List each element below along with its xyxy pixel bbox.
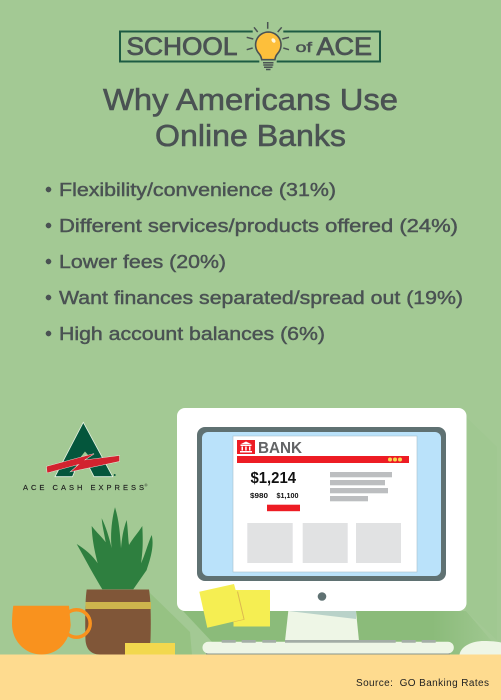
logo: School of ACE: SCHOOL — [126, 33, 238, 61]
bank web page: BANK — [258, 440, 303, 457]
keyboard — [202, 640, 454, 654]
sticky notes — [199, 584, 270, 628]
bullet 1: Flexibility/convenience (31%) — [59, 179, 336, 200]
plant pot — [85, 590, 151, 654]
mug — [12, 606, 90, 654]
bullet 4: Want finances separated/spread out (19%) — [59, 287, 463, 308]
camera dot — [318, 592, 326, 601]
ACE Cash Express logo — [23, 422, 148, 492]
logo: School of ACE — [120, 22, 380, 70]
bank web page: $1,214 — [250, 470, 296, 487]
bank web page: $1,100 — [276, 493, 299, 500]
ACE Cash Express logo: ACE CASH EXPRESS — [23, 483, 144, 492]
monitor stand — [285, 611, 359, 641]
bank web page: $980 — [250, 493, 268, 500]
screen — [202, 432, 441, 576]
bullet 3: Lower fees (20%) — [59, 251, 226, 272]
source note: Source: GO Banking Rates — [356, 678, 489, 689]
plant — [77, 507, 153, 589]
mouse — [460, 641, 501, 654]
bullet 5: High account balances (6%) — [59, 323, 325, 344]
title: Why Americans Use — [103, 82, 398, 117]
icon: bank — [237, 440, 255, 454]
ACE Cash Express logo: ® — [144, 482, 148, 488]
screen frame — [197, 427, 446, 581]
bullet list — [46, 179, 463, 344]
icon: light bulb — [247, 22, 289, 70]
desk shadows — [150, 417, 497, 655]
title: Online Banks — [155, 118, 346, 153]
monitor — [177, 408, 466, 611]
logo: School of ACE: of — [296, 39, 312, 55]
bank web page — [233, 436, 417, 572]
yellow note on desk — [125, 643, 175, 654]
title — [103, 82, 398, 153]
bullet 2: Different services/products offered (24%) — [59, 215, 458, 236]
logo: School of ACE: ACE — [316, 33, 372, 61]
desk — [0, 654, 501, 700]
